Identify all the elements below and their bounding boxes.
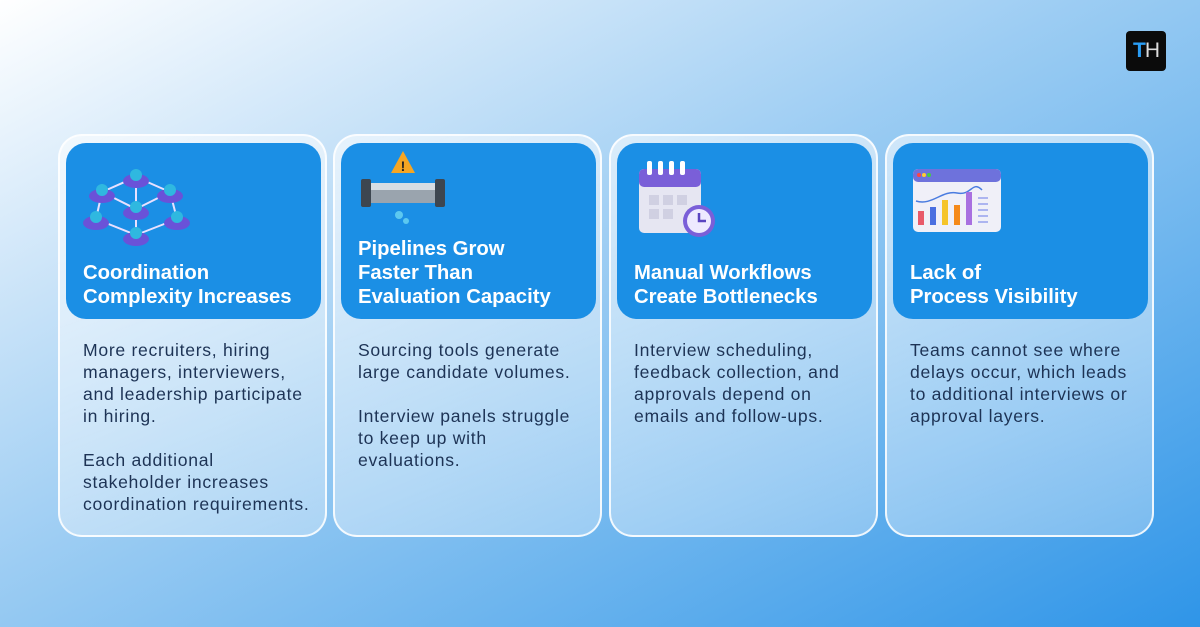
header 4 [893, 143, 1148, 319]
title 4 [910, 262, 1078, 308]
title 4: Lack of [910, 262, 981, 284]
body 2: Sourcing tools generate [358, 340, 560, 360]
body 4: to additional interviews or [910, 384, 1127, 404]
body 4: approval layers. [910, 406, 1045, 426]
body 3 [634, 340, 840, 426]
body 3: emails and follow-ups. [634, 406, 823, 426]
logo [1126, 31, 1166, 71]
icon: pipe with warning [361, 151, 445, 224]
body 2: to keep up with [358, 428, 487, 448]
body 1: Each additional [83, 450, 214, 470]
body 3: Interview scheduling, [634, 340, 813, 360]
title 2: Pipelines Grow [358, 238, 505, 260]
body 2: large candidate volumes. [358, 362, 570, 382]
title 2: Evaluation Capacity [358, 286, 551, 308]
icon: pipe with warning: ! [401, 158, 405, 174]
body 1: stakeholder increases [83, 472, 269, 492]
icon: chart window [913, 169, 1001, 232]
body 1: and leadership participate [83, 384, 303, 404]
card 4: visibility [885, 134, 1154, 537]
body 3: approvals depend on [634, 384, 812, 404]
header 1 [66, 143, 321, 319]
body 4: delays occur, which leads [910, 362, 1127, 382]
title 1 [83, 262, 292, 308]
icon: calendar [639, 161, 715, 237]
header 2 [341, 143, 596, 319]
card 2: pipelines [333, 134, 602, 537]
body 1: in hiring. [83, 406, 157, 426]
title 1: Complexity Increases [83, 286, 292, 308]
body 1: managers, interviewers, [83, 362, 286, 382]
title 3: Create Bottlenecks [634, 286, 818, 308]
title 2 [358, 238, 551, 308]
title 4: Process Visibility [910, 286, 1078, 308]
body 1 [83, 340, 310, 514]
body 1: coordination requirements. [83, 494, 310, 514]
body 3: feedback collection, and [634, 362, 840, 382]
title 3 [634, 262, 818, 308]
body 2: evaluations. [358, 450, 460, 470]
card 3: manual workflows [609, 134, 878, 537]
body 2 [358, 340, 570, 470]
body 4 [910, 340, 1127, 426]
icon: network [83, 169, 190, 246]
title 1: Coordination [83, 262, 209, 284]
body 4: Teams cannot see where [910, 340, 1121, 360]
title 2: Faster Than [358, 262, 473, 284]
body 2: Interview panels struggle [358, 406, 570, 426]
title 3: Manual Workflows [634, 262, 812, 284]
header 3 [617, 143, 872, 319]
body 1: More recruiters, hiring [83, 340, 270, 360]
card 1: coordination [58, 134, 327, 537]
logo: TH [1133, 39, 1159, 62]
